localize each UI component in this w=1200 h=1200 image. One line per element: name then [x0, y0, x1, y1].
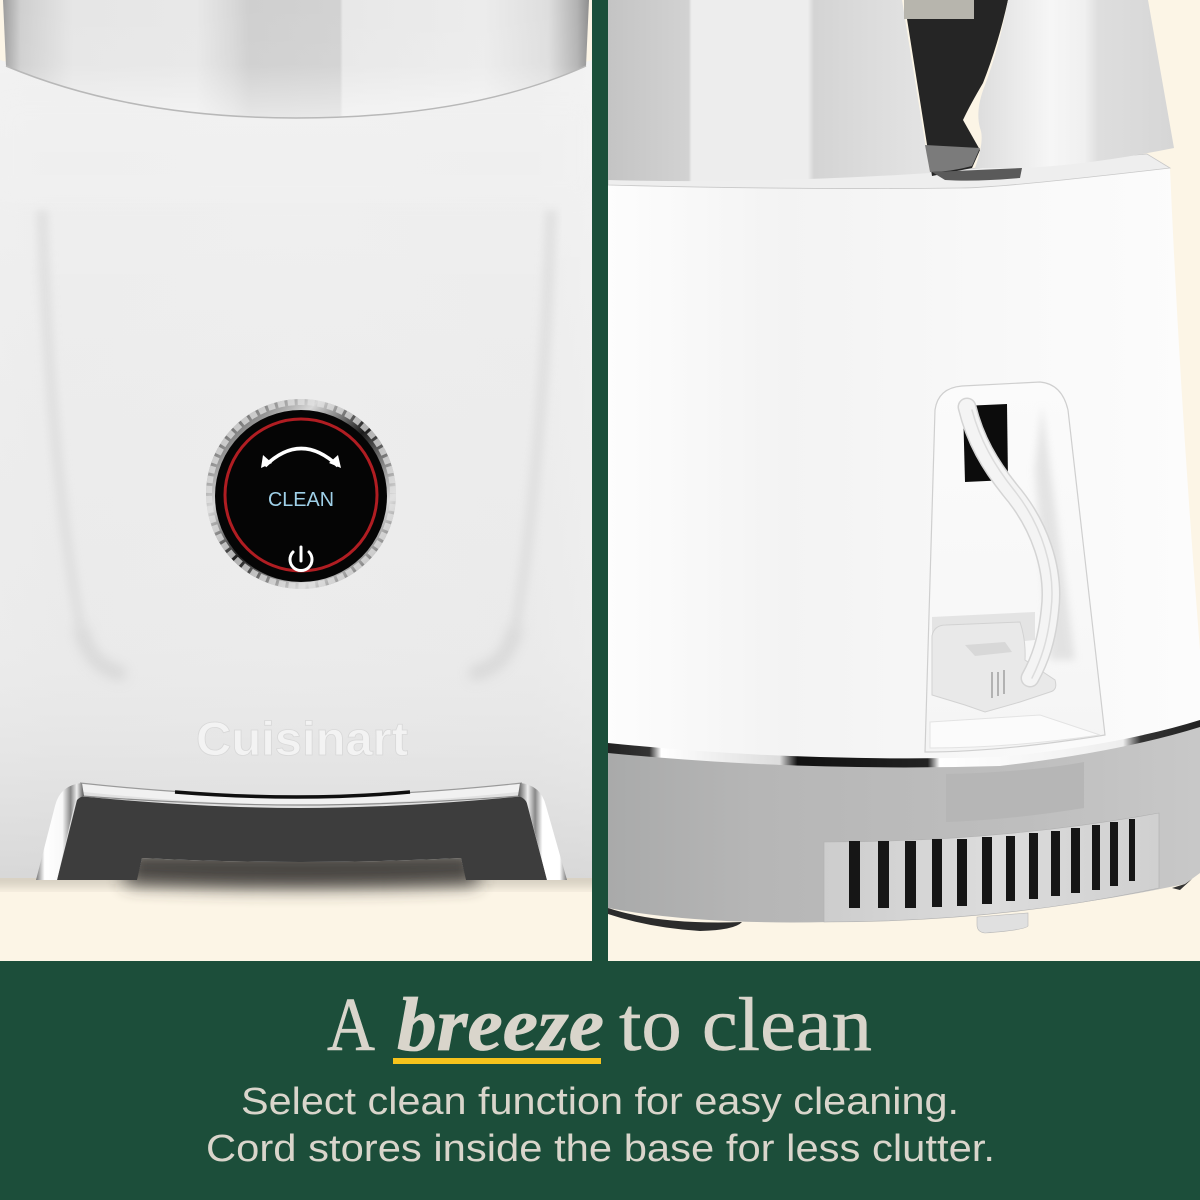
- body copy: Cord stores inside the base for less clutter.: [206, 1128, 995, 1170]
- panel: right photo, cord storage on blender rear: [608, 0, 1200, 933]
- yellow underline: [393, 1058, 601, 1064]
- jar, right section: [975, 0, 1174, 168]
- panel: left photo, clean function knob on blender base: [0, 0, 620, 888]
- right foot: [1172, 879, 1192, 890]
- panel: green caption band: [0, 961, 1200, 1200]
- jar, left section: [608, 0, 930, 181]
- heading: A: [327, 983, 375, 1067]
- body copy: [206, 1081, 995, 1170]
- chrome right leg: [518, 783, 567, 880]
- dark recess: [57, 796, 547, 880]
- chrome rail: [80, 787, 522, 800]
- left foot: [608, 908, 742, 931]
- control knob: [206, 399, 396, 589]
- heading: [327, 983, 872, 1067]
- jar bottom, chrome reflection: [3, 0, 589, 118]
- cord storage niche: [925, 382, 1105, 752]
- cord: [967, 407, 1052, 678]
- heading: breeze: [397, 983, 604, 1067]
- collar ring under jar: [608, 154, 1170, 189]
- icon: power: [290, 547, 312, 571]
- body copy: Select clean function for easy cleaning.: [241, 1081, 959, 1123]
- chrome band: [608, 720, 1200, 767]
- label patch: [1024, 762, 1084, 816]
- jar, dark window wedge: [904, 0, 1022, 181]
- cord slot: [963, 404, 1008, 482]
- base handle recess with chrome trim: [36, 783, 567, 880]
- centre tab: [977, 913, 1028, 933]
- red ring: [225, 419, 377, 571]
- niche floor: [930, 715, 1100, 748]
- plug: [932, 612, 1056, 712]
- vent panel: [824, 813, 1159, 922]
- speed arc arrow: [261, 448, 341, 468]
- chrome left leg: [36, 783, 84, 880]
- Cuisinart logo: Cuisinart: [196, 712, 408, 765]
- blender body rear: [608, 168, 1200, 760]
- CLEAN label: CLEAN: [268, 489, 334, 511]
- vent slots: [849, 819, 1135, 908]
- grey base with vents: [608, 725, 1200, 933]
- vertical green divider: [592, 0, 608, 961]
- heading: to clean: [619, 983, 872, 1067]
- floor shadow beneath base: [0, 850, 620, 888]
- blender base front: [0, 60, 592, 878]
